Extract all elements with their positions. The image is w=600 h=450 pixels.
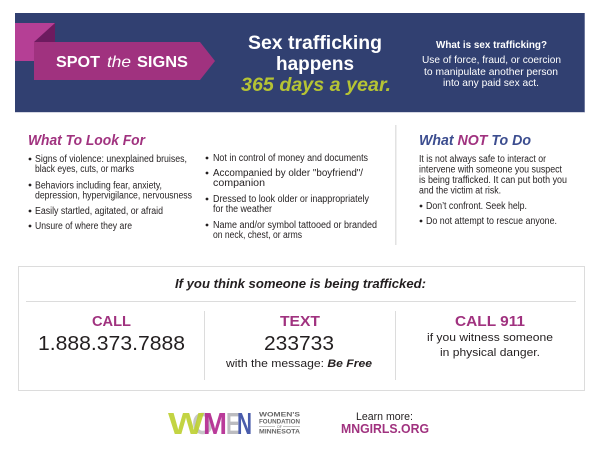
panel: what to look for bbox=[28, 132, 377, 241]
logo wordmark: M bbox=[203, 406, 227, 441]
contact: text: TEXT bbox=[280, 314, 320, 330]
list: signs column 2: Not in control of money and documents bbox=[213, 153, 368, 164]
contact: call: 1.888.373.7888 bbox=[38, 333, 185, 355]
contact: text: 233733 bbox=[264, 333, 334, 355]
contact: text bbox=[225, 314, 372, 370]
contact: call 911: CALL 911 bbox=[455, 314, 525, 330]
paragraph: safety warning: intervene with someone you suspect bbox=[419, 164, 562, 176]
contact: call 911 bbox=[427, 314, 553, 359]
heading: if you think: If you think someone is being trafficked: bbox=[175, 276, 426, 291]
definition text: to manipulate another person bbox=[424, 66, 558, 78]
heading: what to look for: What To Look For bbox=[28, 132, 146, 149]
list: signs column 1: Signs of violence: unexplained bruises, bbox=[35, 154, 187, 165]
list: signs column 2: Name and/or symbol tattooed or branded bbox=[213, 220, 377, 231]
contact: call 911: in physical danger. bbox=[440, 347, 540, 359]
definition text: What is sex trafficking? bbox=[436, 40, 547, 51]
logo organisation name: FOUNDATION bbox=[259, 418, 300, 426]
headline: happens bbox=[276, 53, 354, 75]
headline: Sex trafficking bbox=[248, 32, 382, 54]
logo organisation name: WOMEN'S bbox=[259, 412, 301, 418]
definition text: Use of force, fraud, or coercion bbox=[422, 54, 561, 66]
paragraph: safety warning bbox=[419, 154, 567, 196]
definition text: into any paid sex act. bbox=[443, 77, 539, 89]
logo wordmark: E bbox=[226, 406, 240, 441]
ribbon: spot the signs: SIGNS bbox=[137, 54, 188, 71]
list: signs column 2: companion bbox=[213, 178, 265, 189]
contact: call: CALL bbox=[92, 314, 131, 330]
logo: women's foundation of minnesota bbox=[168, 406, 301, 441]
logo organisation name: OF bbox=[277, 425, 282, 429]
logo organisation name bbox=[259, 412, 301, 436]
panel: contact box bbox=[18, 266, 584, 390]
contact: call 911: if you witness someone bbox=[427, 332, 553, 344]
list: signs column 1: depression, hypervigilance, nervousness bbox=[35, 190, 192, 202]
list: do not: Do not attempt to rescue anyone. bbox=[426, 216, 557, 227]
list: signs column 2: for the weather bbox=[213, 204, 273, 215]
list: signs column 1: Unsure of where they are bbox=[35, 221, 132, 232]
list: do not: Don’t confront. Seek help. bbox=[426, 201, 527, 212]
definition text bbox=[422, 40, 561, 89]
ribbon: spot the signs bbox=[15, 23, 215, 80]
learn more: Learn more: bbox=[356, 411, 413, 423]
list: signs column 2: Accompanied by older "boyfriend"/ bbox=[213, 168, 363, 179]
logo wordmark: O bbox=[192, 406, 214, 441]
list: signs column 2: Dressed to look older or inappropriately bbox=[213, 194, 369, 205]
list: signs column 2: on neck, chest, or arms bbox=[213, 230, 302, 241]
paragraph: safety warning: and the victim at risk. bbox=[419, 186, 501, 196]
list: signs column 1: Easily startled, agitated, or afraid bbox=[35, 206, 163, 217]
list: signs column 1: black eyes, cuts, or marks bbox=[35, 164, 134, 175]
panel: what not to do bbox=[419, 132, 567, 227]
logo wordmark: W bbox=[168, 406, 205, 441]
ribbon: spot the signs: SPOT bbox=[56, 54, 100, 71]
logo wordmark bbox=[168, 406, 252, 441]
learn more: MNGIRLS.ORG bbox=[341, 421, 429, 436]
panel: header banner bbox=[15, 13, 585, 112]
logo organisation name: MINNESOTA bbox=[259, 428, 300, 436]
list: signs column 2 bbox=[206, 153, 377, 241]
headline bbox=[241, 32, 391, 96]
logo wordmark: N bbox=[237, 406, 252, 441]
list: signs column 1 bbox=[29, 154, 192, 232]
contact: text: with the message: Be Free bbox=[225, 358, 372, 370]
learn more bbox=[341, 411, 429, 436]
ribbon: spot the signs: the bbox=[107, 54, 131, 71]
list: do not bbox=[420, 201, 557, 227]
paragraph: safety warning: It is not always safe to interact or bbox=[419, 154, 547, 165]
headline: 365 days a year. bbox=[241, 74, 391, 96]
paragraph: safety warning: is being trafficked. It can put both you bbox=[419, 175, 567, 186]
heading: what not to do: What NOT To Do bbox=[419, 132, 531, 149]
contact: call bbox=[38, 314, 185, 355]
list: signs column 1: Behaviors including fear, anxiety, bbox=[35, 180, 162, 192]
